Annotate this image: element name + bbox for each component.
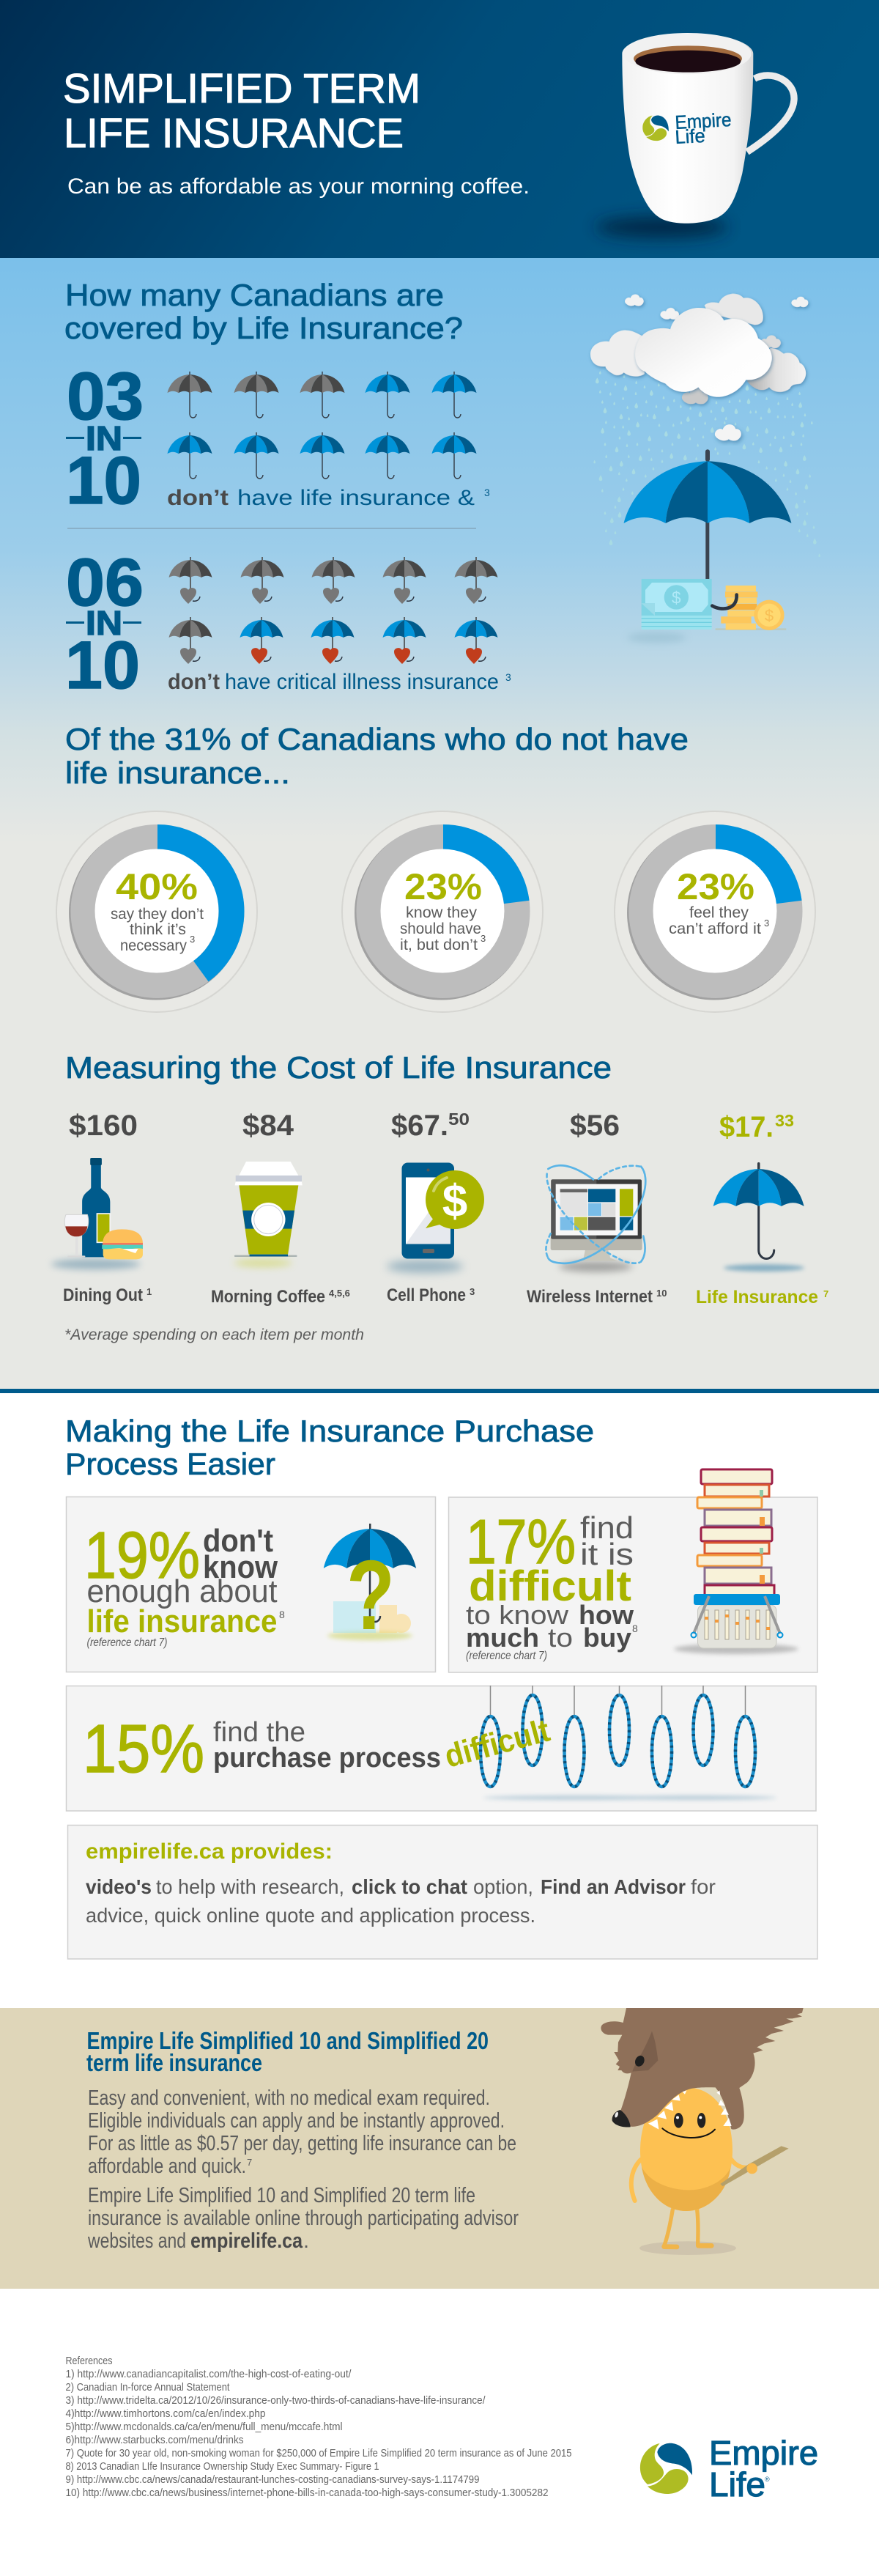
heading: of the 31%: life insurance... xyxy=(65,756,290,790)
donut chart: 23% know they should: it, but don’t xyxy=(400,937,478,953)
heading: making the purchase easier xyxy=(65,1414,594,1481)
icon: umbrella with question mark: ? xyxy=(346,1540,395,1650)
donut chart: 23% know they should: know they xyxy=(406,904,478,921)
body copy: affordable and quick. xyxy=(88,2155,246,2178)
cost item: life insurance: 33 xyxy=(775,1111,794,1130)
icon: umbrella with question mark xyxy=(324,1524,416,1650)
panel: empirelife.ca provides: option, xyxy=(473,1875,533,1898)
icon: banknotes: $ xyxy=(672,588,681,607)
panel: empirelife.ca provides: advice, quick online quote and application process. xyxy=(86,1904,535,1927)
icon: hanging rings xyxy=(481,1686,776,1800)
caption: life insurance: have life insurance & xyxy=(237,486,475,510)
heading: making the purchase easier: Making the Life Insurance Purchase xyxy=(65,1414,594,1448)
donut chart: 40% xyxy=(56,811,257,1012)
body copy: insurance is available online through participating advisor xyxy=(88,2207,519,2230)
label: wireless internet: Wireless Internet xyxy=(527,1287,653,1307)
icon: banknotes xyxy=(628,579,712,643)
panel heading: Empire Life Simplified 10 and Simplified 20 xyxy=(86,2027,489,2054)
title xyxy=(63,65,420,157)
caption: critical illness: 3 xyxy=(505,671,511,683)
body copy: For as little as $0.57 per day, getting life insurance can be xyxy=(88,2132,516,2155)
donut chart: 40%: 40% xyxy=(116,866,198,907)
stat: 3 in 10: IN xyxy=(86,419,122,457)
panel: empirelife.ca provides: for xyxy=(691,1875,716,1898)
donut chart: 23% can't afford: can’t afford it xyxy=(669,920,761,937)
heading: of the 31% xyxy=(65,722,689,790)
references: 3) http://www.tridelta.ca/2012/10/26/insurance-only-two-thirds-of-canadians-have-life-insurance/ xyxy=(66,2395,486,2407)
cost item: dining out xyxy=(51,1110,152,1305)
references: 7) Quote for 30 year old, non-smoking woman for $250,000 of Empire Life Simplified 20 term insurance as of June 2015 xyxy=(66,2448,571,2459)
label: dining out: Dining Out xyxy=(63,1285,143,1305)
panel: 19% don't know enough: enough about xyxy=(86,1573,277,1609)
stat: 3 in 10: 03 xyxy=(67,359,144,434)
panel: 19% don't know enough: 19% xyxy=(84,1519,200,1593)
stat: 3 in 10 xyxy=(66,359,490,518)
panel: 17% find it difficult: much xyxy=(466,1623,539,1653)
body copy xyxy=(87,2086,519,2253)
donut chart: 23% can't afford: 23% xyxy=(677,866,754,907)
cost item: life insurance: $17. xyxy=(719,1111,774,1143)
illustration: clouds, rain, umbrella and money xyxy=(590,294,820,643)
references: 8) 2013 Canadian LIfe Insurance Ownership Study Exec Summary- Figure 1 xyxy=(66,2461,379,2473)
cost item: cell phone: 50 xyxy=(448,1110,470,1129)
cost item: morning coffee: $84 xyxy=(242,1110,294,1142)
body copy: Empire Life Simplified 10 and Simplified 20 term life xyxy=(88,2184,475,2207)
caption: critical illness: don’t xyxy=(168,670,220,694)
cost item: life insurance xyxy=(696,1111,828,1307)
icon: monitor with orbits xyxy=(546,1165,645,1272)
cost item: wireless internet xyxy=(527,1110,667,1307)
cost item: wireless internet: $56 xyxy=(570,1110,620,1142)
footnote: average spending: *Average spending on each item per month xyxy=(64,1326,364,1343)
heading: of the 31%: Of the 31% of Canadians who do not have xyxy=(65,722,689,756)
stat: 6 in 10: IN xyxy=(86,604,122,642)
caption: critical illness: have critical illness insurance xyxy=(225,670,499,694)
panel: empirelife.ca provides xyxy=(67,1825,817,1959)
umbrella pictogram: 6 of 10 with hearts xyxy=(168,557,498,664)
logo: Empire Life: ® xyxy=(765,2476,770,2483)
panel: 17% find it difficult: how xyxy=(579,1600,634,1630)
heading: how many Canadians: covered by Life Insurance? xyxy=(64,311,463,345)
label: wireless internet: 10 xyxy=(656,1288,667,1299)
mug logo wordmark xyxy=(675,108,732,148)
icon: coffee mug xyxy=(596,33,794,238)
panel: 19% don't know enough: don't xyxy=(203,1523,273,1559)
stat: 3 in 10: 10 xyxy=(66,443,141,518)
panel: 17% find it difficult: (reference chart 7) xyxy=(466,1650,547,1662)
body copy: websites and xyxy=(87,2229,186,2253)
panel: 17% find it difficult xyxy=(448,1469,817,1672)
panel: 19% don't know enough: life insurance xyxy=(86,1603,277,1639)
heading: measuring the cost: Measuring the Cost of Life Insurance xyxy=(65,1050,612,1085)
icon: stack of books in basket xyxy=(674,1469,798,1654)
caption: life insurance: don’t xyxy=(167,486,229,510)
label: morning coffee: 4,5,6 xyxy=(329,1288,350,1299)
panel heading: term life insurance xyxy=(86,2049,262,2076)
panel: empirelife.ca provides: click to chat xyxy=(352,1875,467,1898)
heading: how many Canadians xyxy=(64,278,463,345)
panel: 15% find the process difficult: purchase process xyxy=(213,1743,441,1774)
donut chart: 23% know they should: should have xyxy=(400,920,481,937)
panel: 19% don't know enough: 8 xyxy=(279,1609,285,1620)
body copy: Eligible individuals can apply and be instantly approved. xyxy=(88,2109,505,2133)
section divider xyxy=(0,1389,879,1393)
donut chart: 23% know they should xyxy=(342,811,543,1012)
heading: making the purchase easier: Process Easier xyxy=(65,1447,275,1481)
references: 9) http://www.cbc.ca/news/canada/restaurant-lunches-costing-canadians-survey-says-1.1174799 xyxy=(66,2474,479,2486)
label: cell phone: Cell Phone xyxy=(387,1285,466,1305)
subtitle: Can be as affordable as your morning coffee. xyxy=(67,174,530,199)
heading: how many Canadians: How many Canadians are xyxy=(65,278,444,312)
donut chart: 40%: think it’s xyxy=(130,921,186,938)
panel: 19% don't know enough: (reference chart 7) xyxy=(86,1636,167,1649)
references: 1) http://www.canadiancapitalist.com/the-high-cost-of-eating-out/ xyxy=(66,2369,352,2380)
references: 6)http://www.starbucks.com/menu/drinks xyxy=(66,2435,243,2446)
panel: empirelife.ca provides: empirelife.ca provides: xyxy=(86,1839,333,1864)
icon: coffee cup xyxy=(234,1162,303,1267)
body copy: empirelife.ca xyxy=(190,2229,303,2253)
title: LIFE INSURANCE xyxy=(64,110,404,157)
references: 5)http://www.mcdonalds.ca/ca/en/menu/full_menu/mccafe.html xyxy=(66,2421,343,2433)
references xyxy=(66,2355,571,2499)
panel heading xyxy=(86,2027,489,2076)
label: cell phone: 3 xyxy=(470,1286,475,1297)
donut chart: 23% can't afford xyxy=(615,811,815,1012)
panel: 17% find it difficult: 17% xyxy=(466,1507,576,1577)
donut chart: 23% know they should: 23% xyxy=(404,866,482,907)
cost item: cell phone xyxy=(387,1110,484,1305)
mug logo wordmark: Empire xyxy=(675,108,732,133)
icon: umbrella xyxy=(713,1162,804,1272)
label: dining out: 1 xyxy=(146,1286,152,1297)
icon: large umbrella xyxy=(623,449,791,581)
cost item: morning coffee xyxy=(211,1110,350,1307)
umbrella pictogram: 3 of 10 xyxy=(167,372,476,479)
donut chart: 23% can't afford: feel they xyxy=(689,904,749,921)
logo: Empire Life: Life xyxy=(709,2465,765,2503)
references: 10) http://www.cbc.ca/news/business/internet-phone-bills-in-canada-too-high-says-consumer-study-1.3005282 xyxy=(66,2487,548,2499)
body copy: Easy and convenient, with no medical exam required. xyxy=(88,2086,490,2110)
panel: 15% find the process difficult xyxy=(66,1686,816,1811)
body copy: . xyxy=(303,2229,309,2253)
stat: 6 in 10: 06 xyxy=(66,545,144,620)
caption: life insurance xyxy=(167,486,490,510)
donut chart: 40%: say they don’t xyxy=(111,906,204,923)
references: References xyxy=(66,2355,113,2367)
panel: 17% find it difficult: 8 xyxy=(632,1623,638,1634)
title: SIMPLIFIED TERM xyxy=(63,65,420,112)
caption: life insurance: 3 xyxy=(484,487,490,498)
icon: wine bottle, glass and burger xyxy=(51,1158,143,1269)
icon: coin stacks: $ xyxy=(765,606,774,624)
panel: 15% find the process difficult: difficult xyxy=(441,1712,554,1775)
label: life insurance: 7 xyxy=(823,1288,828,1299)
stat: 6 in 10 xyxy=(65,545,511,703)
panel: 17% find it difficult: find xyxy=(580,1510,634,1545)
panel: 15% find the process difficult: 15% xyxy=(83,1710,204,1787)
cost item: cell phone: $67. xyxy=(391,1110,448,1142)
panel: Empire Life Simplified 10 and 20 xyxy=(0,2008,879,2289)
icon: phone with dollar bubble xyxy=(387,1162,484,1273)
donut chart: 40%: necessary xyxy=(120,937,187,954)
panel: 17% find it difficult: buy xyxy=(583,1623,631,1653)
panel: empirelife.ca provides: video's xyxy=(86,1875,152,1898)
panel: 17% find it difficult: it is xyxy=(580,1537,634,1571)
header banner xyxy=(0,0,879,258)
stat: 6 in 10: 10 xyxy=(65,628,140,703)
donut chart: 40%: 3 xyxy=(190,934,195,945)
background: grey cost section xyxy=(0,843,879,1389)
rain xyxy=(593,371,820,557)
clouds xyxy=(590,294,808,440)
logo: Empire Life: Empire xyxy=(709,2434,818,2472)
logo: Empire Life xyxy=(640,2434,818,2503)
references: 2) Canadian In-force Annual Statement xyxy=(66,2382,230,2394)
label: life insurance: Life Insurance xyxy=(696,1287,818,1307)
references: 4)http://www.timhortons.com/ca/en/index.php xyxy=(66,2408,265,2420)
panel: 17% find it difficult: to know xyxy=(466,1600,569,1630)
icon: phone with dollar bubble: $ xyxy=(442,1176,467,1227)
icon: coin stacks xyxy=(712,586,786,630)
panel: empirelife.ca provides: to help with research, xyxy=(156,1875,344,1898)
body copy: 7 xyxy=(247,2157,252,2168)
panel: 19% don't know enough: know xyxy=(203,1549,278,1585)
cost item: dining out: $160 xyxy=(69,1110,138,1142)
illustration: bear and yellow character xyxy=(601,2008,804,2255)
label: morning coffee: Morning Coffee xyxy=(211,1287,325,1307)
panel: 17% find it difficult: difficult xyxy=(469,1562,631,1610)
panel: empirelife.ca provides: Find an Advisor xyxy=(541,1875,686,1898)
panel: 19% don't know enough xyxy=(66,1496,435,1672)
panel: 17% find it difficult: to xyxy=(548,1623,573,1653)
panel: 15% find the process difficult: find the xyxy=(213,1717,305,1748)
mug logo wordmark: Life xyxy=(675,125,705,148)
donut chart: 23% can't afford: 3 xyxy=(764,918,769,929)
donut chart: 23% know they should: 3 xyxy=(481,933,486,944)
background: sky gradient xyxy=(0,258,879,843)
